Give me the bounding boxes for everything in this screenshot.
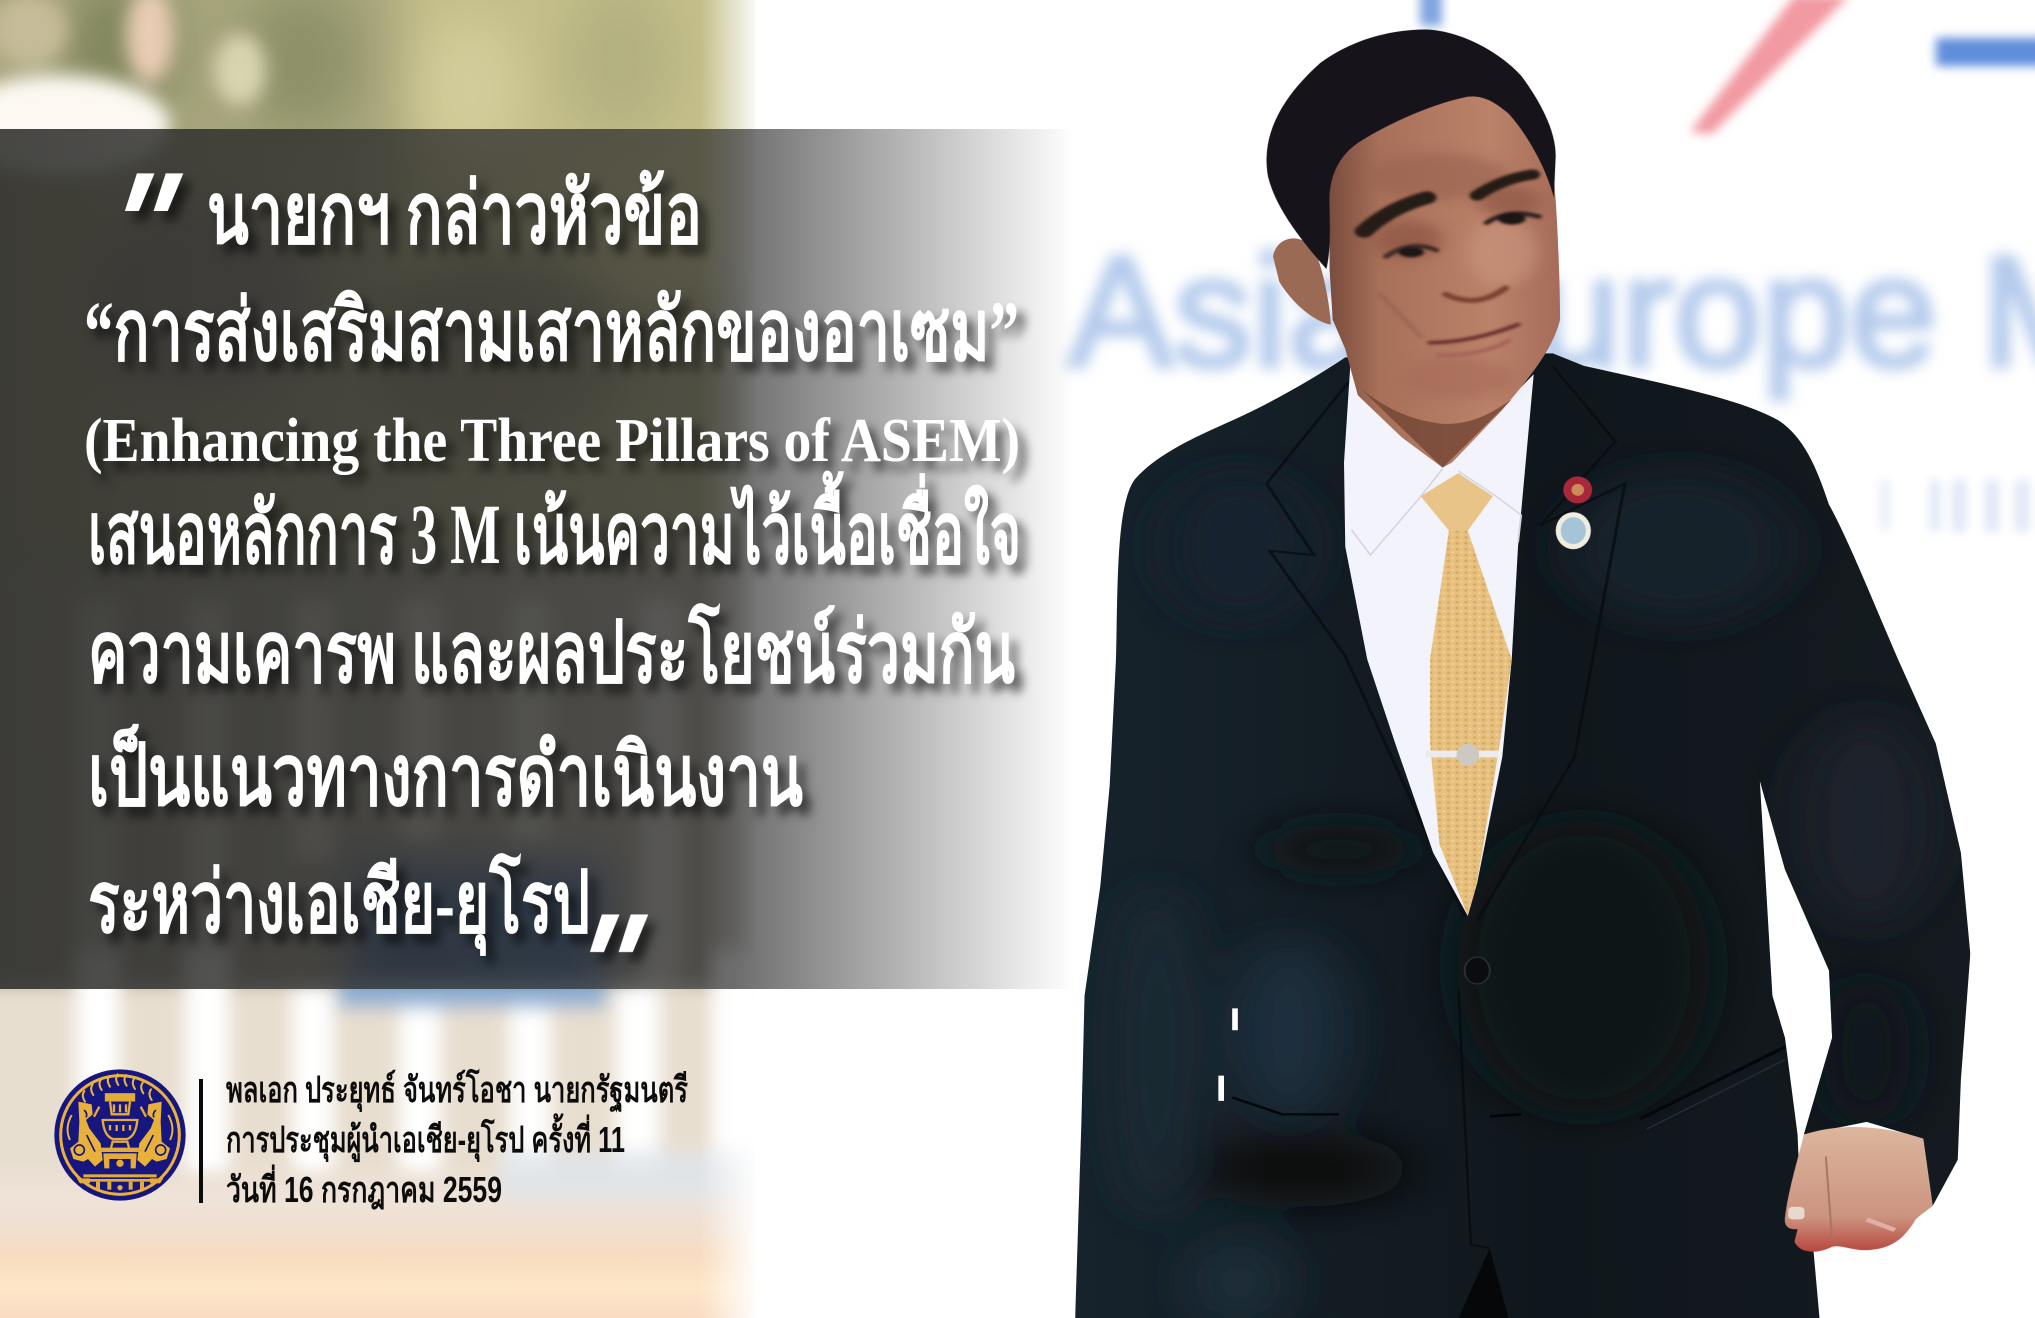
vertical divider (199, 1079, 203, 1203)
quote band with gradient fade (0, 129, 1085, 989)
caption: speaker and event (226, 1068, 688, 1210)
ear (1273, 238, 1331, 325)
facial features (1364, 153, 1540, 399)
shirt collar lines (1352, 469, 1521, 555)
line 1: นายกฯ กล่าวหัวข้อ (207, 166, 702, 262)
line 2: “การส่งเสริมสามเสาหลักของอาเซม” (84, 283, 1019, 379)
tie clip (1426, 744, 1499, 766)
necktie (1421, 473, 1512, 916)
headline quotation text (84, 141, 1021, 1061)
gaps between arm and jacket (1218, 1008, 1238, 1101)
seal flames (83, 1074, 152, 1102)
caption line 3: วันที่ 16 กรกฎาคม 2559 (226, 1164, 502, 1210)
hair (1267, 29, 1556, 269)
neck shadow (1361, 389, 1512, 468)
seal urn (94, 1094, 146, 1149)
background banner: blurred Asia-Europe Meeting sign (1068, 0, 2035, 532)
hand (1785, 1127, 1933, 1252)
background photo: blurred garden and fence (0, 0, 820, 1318)
suit jacket (1075, 353, 1970, 1318)
Thai government seal (54, 1069, 186, 1201)
line 3: (Enhancing the Three Pillars of ASEM) (84, 407, 1020, 475)
line 4: เสนอหลักการ 3 M เน้นความไว้เนื้อเชื่อใจ (88, 470, 1021, 582)
opening quotation mark: " (93, 141, 188, 320)
caption line 1: พลเอก ประยุทธ์ จันทร์โอชา นายกรัฐมนตรี (226, 1068, 688, 1113)
closing quotation mark: " (558, 882, 653, 1061)
jacket button (1465, 957, 1490, 984)
caption line 2: การประชุมผู้นำเอเชีย-ยุโรป ครั้งที่ 11 (226, 1113, 625, 1163)
line 5: ความเคารพ และผลประโยชน์ร่วมกัน (88, 602, 1015, 701)
seal table and base (77, 1148, 163, 1190)
shirt (1344, 366, 1534, 916)
lapel pins (1556, 476, 1592, 549)
seal lions (70, 1102, 170, 1167)
line 7: ระหว่างเอเชีย-ยุโรป (88, 852, 590, 956)
photo of the prime minister (1050, 29, 2035, 1318)
neck and face (1330, 79, 1560, 468)
line 6: เป็นแนวทางการดำเนินงาน (88, 723, 803, 824)
